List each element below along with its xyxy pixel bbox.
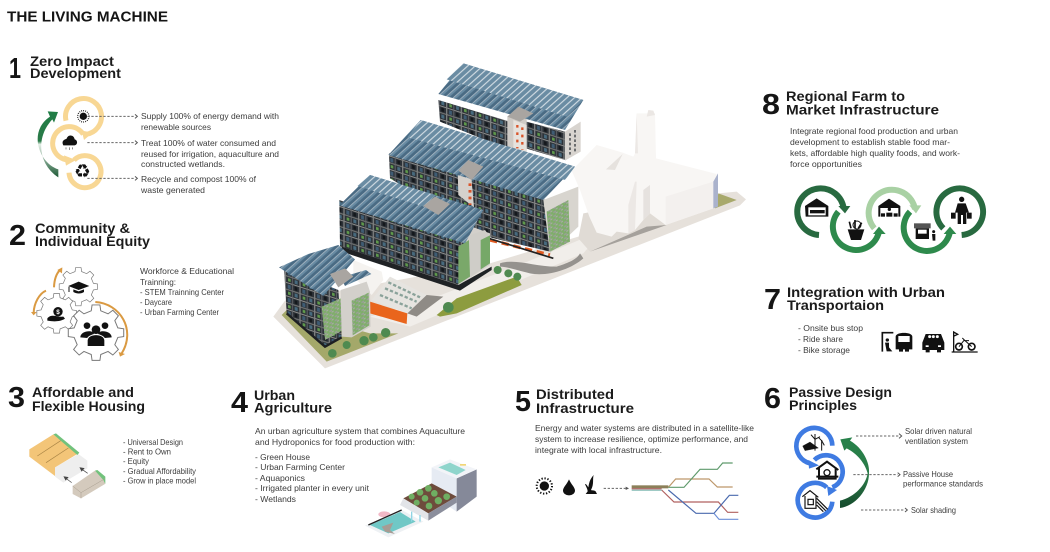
- building C middle: [388, 120, 578, 258]
- text: targets: waste generated: [140, 185, 205, 195]
- facade: [438, 100, 565, 160]
- heading: passive design principles: [789, 385, 892, 413]
- number 8: 8: [762, 89, 780, 121]
- icon: bike storage: [952, 332, 978, 352]
- ring: energy: [66, 99, 102, 140]
- panel: central building: [273, 63, 746, 368]
- dashed leader lines: [87, 114, 137, 180]
- panel: 3 affordable and flexible housing: [8, 382, 197, 498]
- number 3: 3: [8, 382, 25, 414]
- right tip lawn: [715, 193, 737, 208]
- site base: [273, 192, 746, 368]
- ring: water: [53, 127, 83, 166]
- text: housing list: - Universal Design: [123, 437, 183, 447]
- text: distributed infrastructure description: system to increase resilience, optimize performance, and: [535, 434, 748, 444]
- number 4: 4: [231, 387, 248, 419]
- heading: distributed infrastructure: Infrastructure: [536, 401, 635, 416]
- heading: integration with urban transportation: Transportaion: [787, 298, 884, 313]
- icon: ride share car: [922, 334, 944, 352]
- icon: water drop: [563, 479, 575, 495]
- text: passive principles: performance standards: [903, 478, 983, 488]
- ring: waste: [69, 156, 101, 188]
- end tower: [458, 227, 490, 285]
- text: urban agriculture description: [255, 426, 465, 447]
- text: targets: Treat 100% of water consumed and: [141, 138, 276, 148]
- text: transport list: - Bike storage: [798, 345, 850, 355]
- text: targets: constructed wetlands.: [141, 159, 225, 169]
- panel: 6 passive design principles: [764, 383, 983, 518]
- heading: urban agriculture: [254, 388, 333, 416]
- text: regional farm description: force opportunities: [790, 159, 862, 169]
- icon: plant: [585, 475, 597, 494]
- text: distributed infrastructure description: integrate with local infrastructure.: [535, 445, 662, 455]
- text: urban agriculture list: - Aquaponics: [255, 473, 305, 483]
- text: workforce training: [140, 266, 234, 317]
- text: distributed infrastructure description: Energy and water systems are distributed in a satellite-like: [535, 423, 754, 433]
- gear: people: [68, 305, 124, 360]
- green panel left: [322, 298, 342, 340]
- text: regional farm description: Integrate regional food production and urban: [790, 126, 958, 136]
- arrow: green return: [840, 437, 869, 508]
- icon: solar and wind: [803, 434, 824, 451]
- text: workforce training: - STEM Trainning Center: [140, 287, 224, 297]
- heading: integration with urban transportation: [787, 285, 945, 313]
- core tower: [341, 282, 371, 337]
- pool: [365, 510, 423, 537]
- diagram: housing blocks: [29, 433, 105, 498]
- heading: zero impact development: Zero Impact: [30, 54, 115, 69]
- facade: [339, 200, 465, 285]
- end face: [565, 122, 581, 161]
- text: regional farm description: development to establish stable food mar-: [790, 137, 950, 147]
- facade: [284, 268, 342, 347]
- trees: [328, 266, 521, 358]
- text: regional farm description: kets, affordable high quality foods, and work-: [790, 148, 960, 158]
- heading: community and individual equity: [35, 221, 151, 249]
- planting bed: [400, 483, 457, 521]
- text: passive principles: ventilation system: [905, 436, 968, 446]
- orange feature: [370, 302, 407, 324]
- text: targets: Recycle and compost 100% of: [141, 174, 257, 184]
- icon: market tent: [878, 199, 900, 217]
- landscape planting: [437, 277, 522, 317]
- heading: zero impact development: [30, 54, 122, 81]
- text: housing list: [123, 437, 197, 486]
- text: passive principles: Solar shading: [911, 505, 956, 515]
- ring chain: [797, 188, 983, 251]
- heading: affordable and flexible housing: Affordable and: [32, 385, 134, 400]
- panel: 4 urban agriculture: [231, 387, 477, 537]
- roof panels: [279, 245, 355, 296]
- arrow: green return: [38, 111, 58, 177]
- arrows: [64, 468, 88, 483]
- roof core: [423, 197, 450, 215]
- heading: regional farm to market infrastructure: Market Infrastructure: [786, 102, 940, 118]
- gear: finance: $: [56, 309, 60, 316]
- icon: produce basket: [848, 220, 864, 240]
- ring arrowheads: [838, 205, 956, 234]
- text: workforce training: Trainning:: [140, 277, 176, 287]
- text: transport list: [798, 323, 863, 355]
- site paving: [370, 230, 603, 327]
- heading: urban agriculture: Urban: [254, 388, 295, 403]
- core tower: [507, 107, 527, 153]
- text: workforce training: - Daycare: [140, 297, 172, 307]
- number 7: 7: [764, 284, 781, 316]
- illustration: aquaponics system: [365, 459, 477, 537]
- end face: [543, 187, 578, 253]
- panel: 7 integration with urban transportation: [764, 284, 978, 355]
- heading: community and individual equity: Community &: [35, 221, 130, 236]
- heading: passive design principles: Passive Design: [789, 385, 892, 400]
- roof panels: [388, 120, 575, 200]
- heading: distributed infrastructure: [536, 387, 635, 416]
- roof core: [507, 107, 533, 122]
- panel: 1 zero impact development: [9, 53, 279, 195]
- heading: zero impact development: Development: [30, 66, 122, 81]
- road: [500, 253, 583, 274]
- orange base: [490, 240, 550, 255]
- text: housing list: - Grow in place model: [123, 476, 196, 486]
- heading: affordable and flexible housing: [32, 385, 145, 414]
- icon: farm stall: [805, 198, 828, 217]
- text: urban agriculture list: - Green House: [255, 452, 310, 462]
- gear: education: [59, 268, 97, 306]
- text: housing list: - Rent to Own: [123, 446, 171, 456]
- heading: affordable and flexible housing: Flexible Housing: [32, 399, 145, 414]
- text: targets: [140, 111, 279, 195]
- diagram: passive cycle: [796, 428, 907, 518]
- green roof strip: [53, 433, 79, 455]
- landscape strip left: [282, 310, 398, 362]
- building D rear: [438, 63, 583, 161]
- number 1: 1: [9, 53, 21, 85]
- text: housing list: - Equity: [123, 456, 150, 466]
- heading: regional farm to market infrastructure: [786, 89, 940, 118]
- yellow units: [29, 434, 77, 476]
- icon: shopper: [951, 197, 972, 224]
- dashed leader lines: [853, 434, 907, 512]
- text: passive principles: Passive House: [903, 469, 953, 479]
- number 6: 6: [764, 383, 781, 415]
- text: passive principles: Solar driven natural: [905, 426, 972, 436]
- building B front long: [339, 175, 492, 291]
- roof panels: [438, 63, 583, 130]
- icon: solar shading house: [802, 491, 828, 512]
- roof panels: [339, 175, 483, 243]
- arrows: orange: [31, 267, 127, 357]
- icons: transport: [882, 332, 978, 352]
- text: urban agriculture list: - Irrigated planter in every unit: [255, 483, 370, 493]
- title: THE LIVING MACHINE: [7, 10, 168, 26]
- heading: urban agriculture: Agriculture: [254, 400, 333, 416]
- icon: rain cloud: [63, 135, 77, 150]
- heading: passive design principles: Principles: [789, 398, 857, 413]
- courtyard: [353, 260, 443, 317]
- building A small: [279, 245, 371, 347]
- text: urban agriculture list: - Urban Farming Center: [255, 462, 345, 472]
- church pad: [578, 203, 710, 252]
- icon: vendor stand: [914, 223, 935, 241]
- tank building: [432, 459, 477, 512]
- icon: bus stop: [882, 333, 912, 352]
- icon: passive house: [816, 462, 838, 479]
- text: urban agriculture description: An urban agriculture system that combines Aquaculture: [255, 426, 465, 436]
- white frame: [55, 454, 87, 483]
- core tower: [458, 170, 474, 207]
- panel: 2 community and individual equity: [9, 220, 234, 360]
- text: workforce training: Workforce & Educational: [140, 266, 234, 276]
- text: urban agriculture list: - Wetlands: [255, 494, 296, 504]
- text: housing list: - Gradual Affordability: [123, 466, 197, 476]
- dark base: [342, 247, 492, 291]
- text: urban agriculture description: and Hydroponics for food production with:: [255, 437, 415, 447]
- diagram: energy water waste cycle: [38, 99, 137, 188]
- text: targets: reused for irrigation, aquaculture and: [141, 149, 279, 159]
- icon: sun: [537, 478, 552, 494]
- text: targets: Supply 100% of energy demand with: [141, 111, 279, 121]
- network lines: [662, 463, 738, 519]
- text: transport list: - Ride share: [798, 334, 843, 344]
- facade: [389, 153, 550, 252]
- rings: blue: [796, 428, 843, 518]
- number 5: 5: [515, 386, 531, 418]
- panel: 8 regional farm to market infrastructure: [762, 89, 983, 251]
- panel: 5 distributed infrastructure: [515, 386, 754, 519]
- text: distributed infrastructure description: [535, 423, 754, 455]
- icon: sun: [78, 111, 89, 122]
- diagram: farm to market cycle: [797, 188, 983, 251]
- text: workforce training: - Urban Farming Center: [140, 307, 219, 317]
- icon: recycle: ♻: [74, 162, 91, 183]
- heading: regional farm to market infrastructure: Regional Farm to: [786, 89, 905, 104]
- text: transport list: - Onsite bus stop: [798, 323, 863, 333]
- roof core: [330, 268, 353, 287]
- number 2: 2: [9, 220, 26, 252]
- roof core: [458, 160, 483, 180]
- heading: community and individual equity: Individual Equity: [35, 234, 151, 249]
- heading: integration with urban transportation: Integration with Urban: [787, 285, 945, 300]
- diagram: distribution network: [537, 463, 738, 519]
- text: urban agriculture list: [255, 452, 370, 504]
- text: passive principles: [903, 426, 983, 515]
- white church massing: [572, 110, 718, 237]
- heading: distributed infrastructure: Distributed: [536, 387, 614, 402]
- diagram: three gears: [31, 267, 127, 360]
- text: regional farm description: [790, 126, 960, 169]
- text: targets: renewable sources: [141, 122, 211, 132]
- beige unit: [73, 470, 105, 498]
- trunk bundle: [632, 485, 668, 491]
- arrow: dashed: [604, 487, 629, 490]
